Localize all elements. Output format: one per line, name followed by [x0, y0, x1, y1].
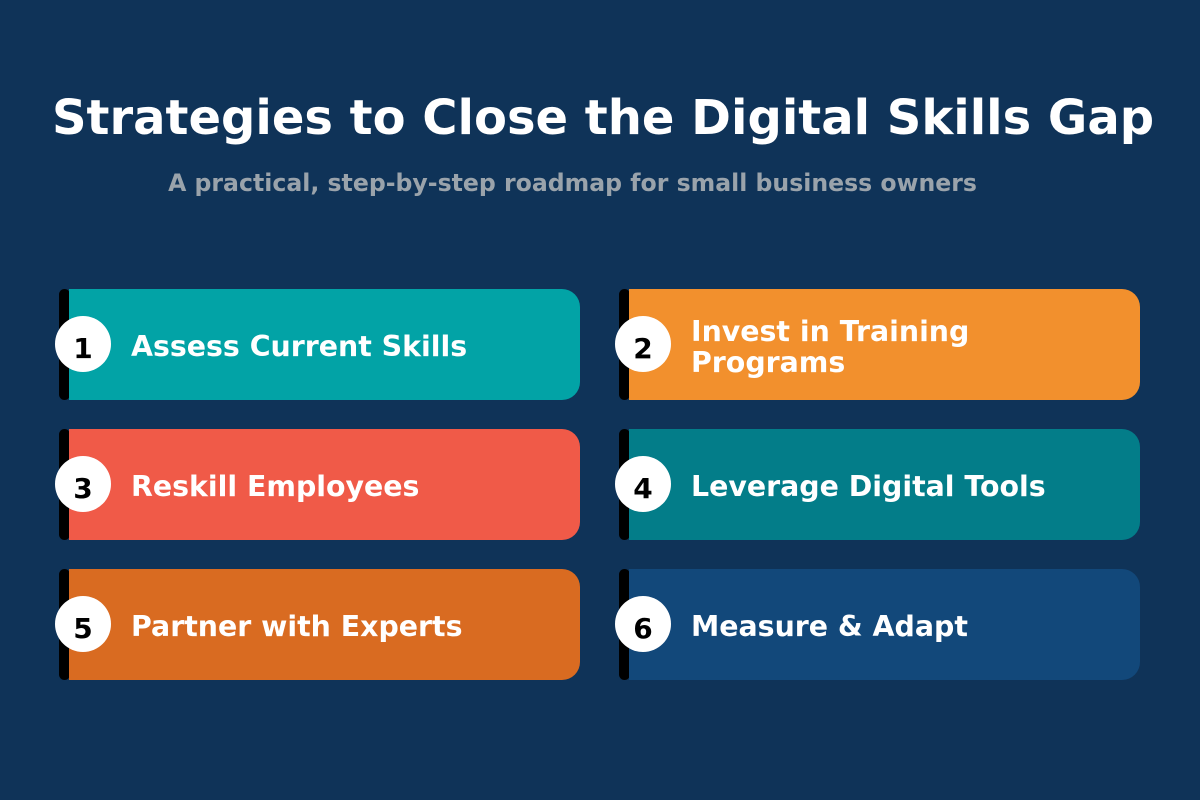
panel: step 2	[615, 289, 1140, 400]
panel: step 2: Invest in Training	[691, 314, 969, 348]
panel: step 1	[55, 289, 580, 400]
panel: step 6: 6	[633, 612, 653, 645]
panel: step 6: Measure & Adapt	[691, 610, 968, 643]
panel: step 5	[55, 569, 580, 680]
panel: step 2: 2	[633, 332, 653, 365]
panel: step 5: 5	[73, 612, 93, 645]
panel: step 4	[615, 429, 1140, 540]
subtitle: A practical, step-by-step roadmap for small business owners	[168, 169, 977, 197]
panel: step 4: Leverage Digital Tools	[691, 470, 1046, 503]
panel: step 5: Partner with Experts	[131, 610, 463, 643]
panel: step 3	[55, 429, 580, 540]
panel: step 2: Programs	[691, 346, 845, 378]
panel: step 1: Assess Current Skills	[131, 330, 467, 363]
panel: step 3: 3	[73, 472, 93, 505]
panel: step 6	[615, 569, 1140, 680]
panel: step 3: Reskill Employees	[131, 470, 419, 503]
panel: step 4: 4	[633, 472, 653, 505]
panel: step 1: 1	[73, 332, 93, 365]
title: Strategies to Close the Digital Skills Gap	[52, 90, 1154, 146]
